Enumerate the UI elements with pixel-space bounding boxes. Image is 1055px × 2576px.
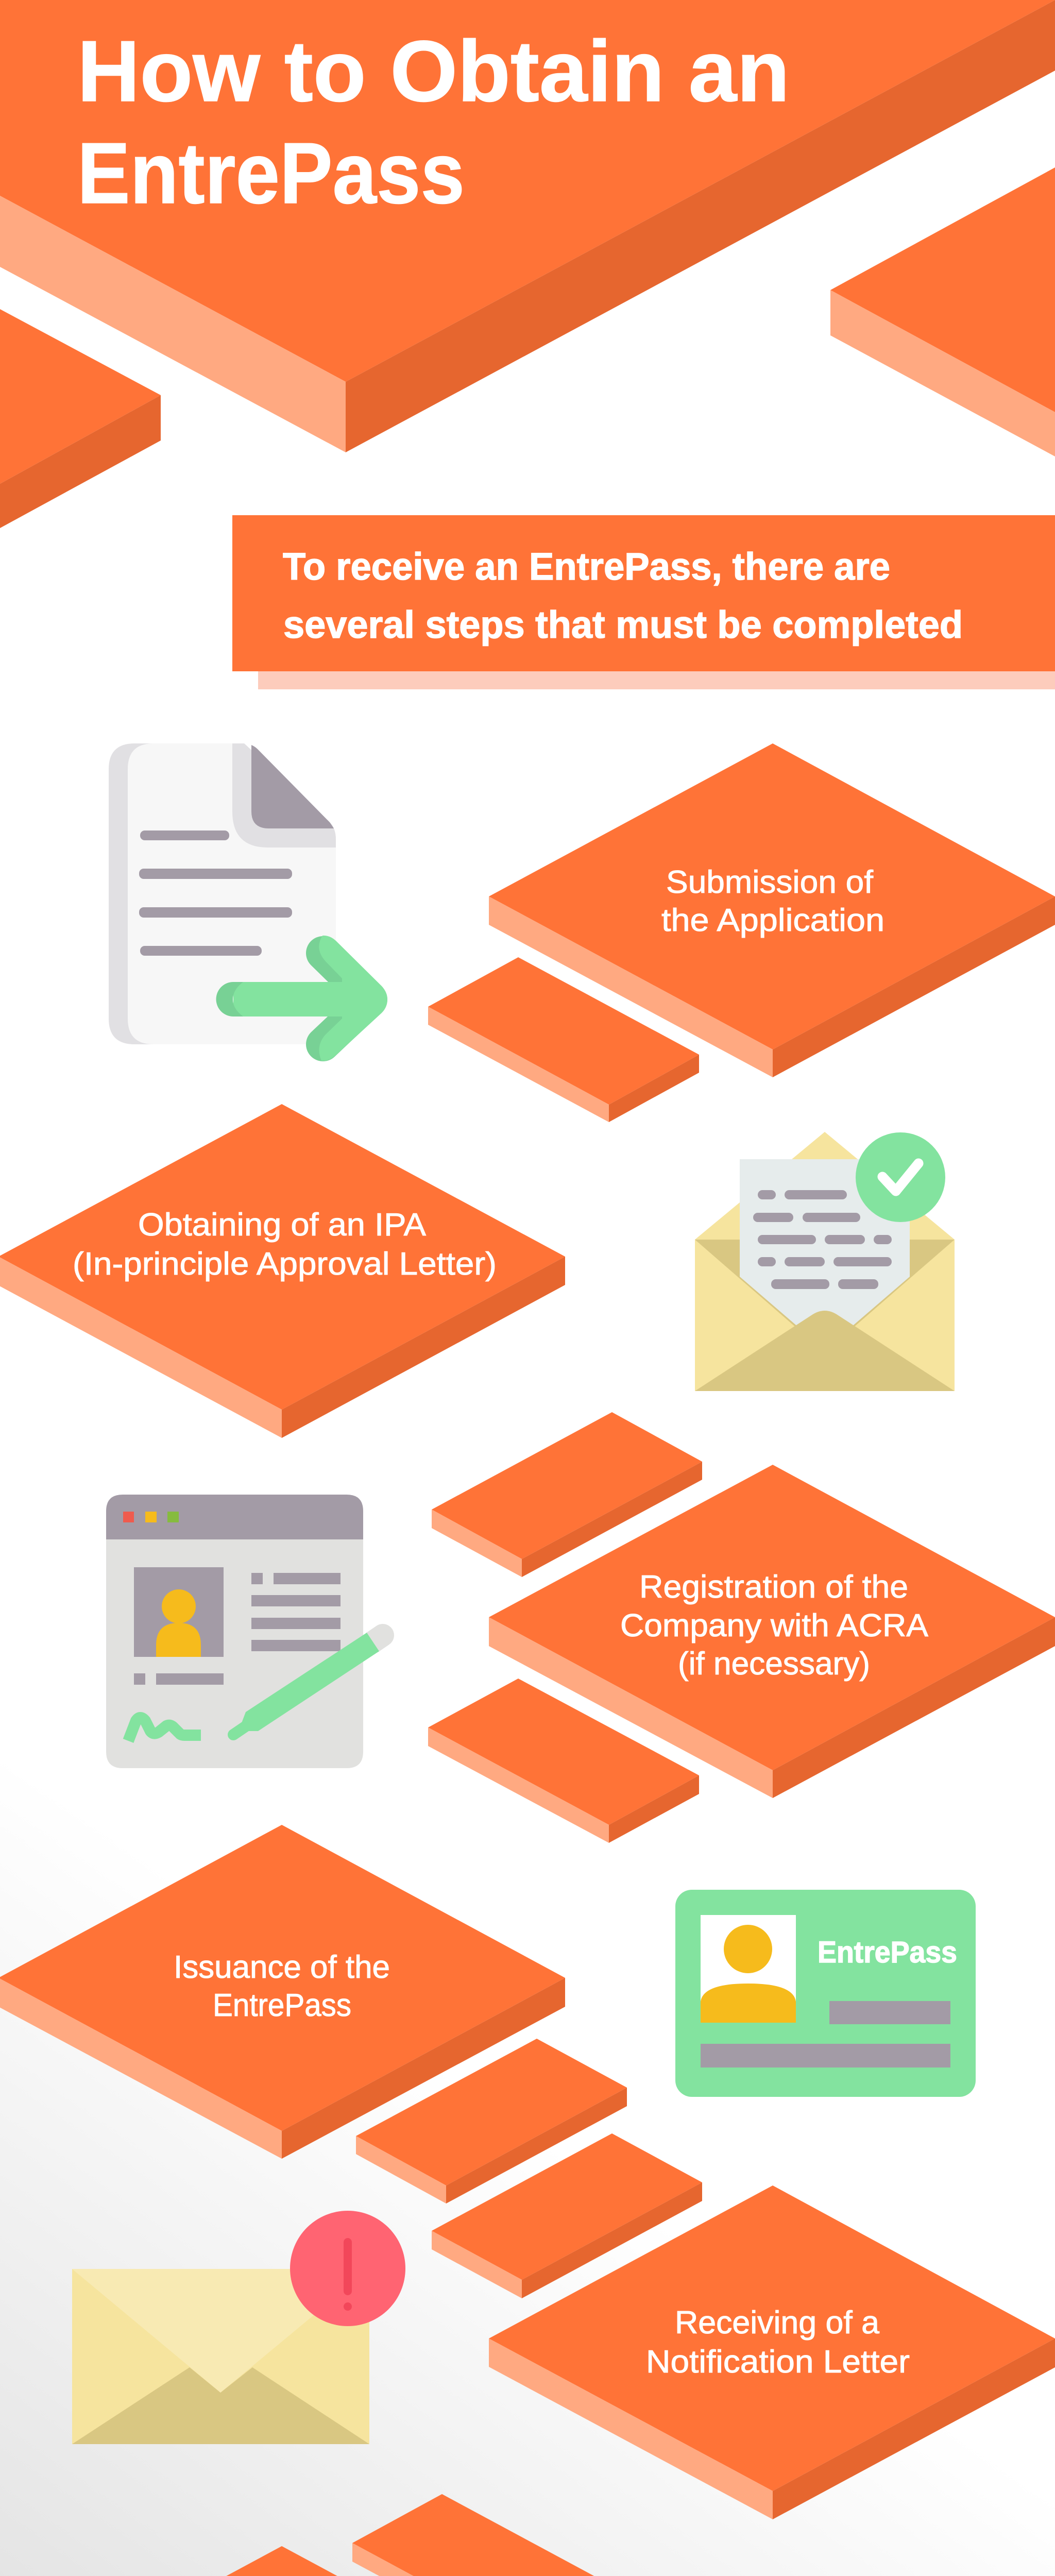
- title: How to Obtain an: [77, 23, 790, 120]
- intro text: To receive an EntrePass, there are: [283, 545, 890, 588]
- intro text: [283, 545, 963, 646]
- connector slab 1: [428, 957, 699, 1122]
- step 3 label: Company with ACRA: [620, 1608, 929, 1643]
- step 4 slab: [0, 1825, 565, 2159]
- connector slab 2: [432, 1412, 702, 1577]
- step 1 label: the Application: [661, 903, 884, 938]
- connector slab 4: [356, 2039, 627, 2204]
- step 5 slab: [489, 2185, 1055, 2519]
- decorative slab left: [0, 309, 161, 528]
- icon: document with arrow: [109, 743, 387, 1061]
- header slab: [0, 0, 1055, 452]
- intro text: several steps that must be completed: [283, 603, 963, 646]
- step 6 slab: [0, 2546, 565, 2576]
- intro banner: [232, 515, 1055, 689]
- step 4 label: Issuance of the: [174, 1950, 390, 1985]
- icon: open envelope with check: [695, 1132, 955, 1391]
- icon: EntrePass ID card: [675, 1890, 976, 2097]
- step 3 label: [620, 1569, 929, 1682]
- step 5 label: Receiving of a: [675, 2305, 880, 2341]
- step 2 label: Obtaining of an IPA: [138, 1207, 427, 1243]
- step 3 label: Registration of the: [639, 1569, 908, 1605]
- decorative slab right: [830, 167, 1055, 456]
- step 4 label: [174, 1950, 390, 2023]
- step 3 label: (if necessary): [678, 1646, 870, 1682]
- step 3 slab: [489, 1465, 1055, 1798]
- step 5 label: Notification Letter: [646, 2344, 910, 2380]
- connector slab 3: [428, 1679, 699, 1843]
- step 2 label: [73, 1207, 497, 1282]
- step 1 label: Submission of: [666, 865, 874, 900]
- step 5 label: [646, 2305, 910, 2380]
- title: EntrePass: [77, 125, 465, 222]
- icon: EntrePass ID card: EntrePass: [818, 1936, 957, 1969]
- step 4 label: EntrePass: [213, 1988, 351, 2023]
- step 2 slab: [0, 1104, 565, 1438]
- step 1 slab: [489, 743, 1055, 1077]
- icon: envelope with alert: [72, 2211, 405, 2444]
- title: [77, 23, 790, 222]
- connector slab 6: [352, 2494, 623, 2576]
- step 2 label: (In-principle Approval Letter): [73, 1246, 497, 1282]
- icon: form with pen: [106, 1495, 383, 1768]
- step 1 label: [661, 865, 884, 938]
- connector slab 5: [432, 2133, 702, 2298]
